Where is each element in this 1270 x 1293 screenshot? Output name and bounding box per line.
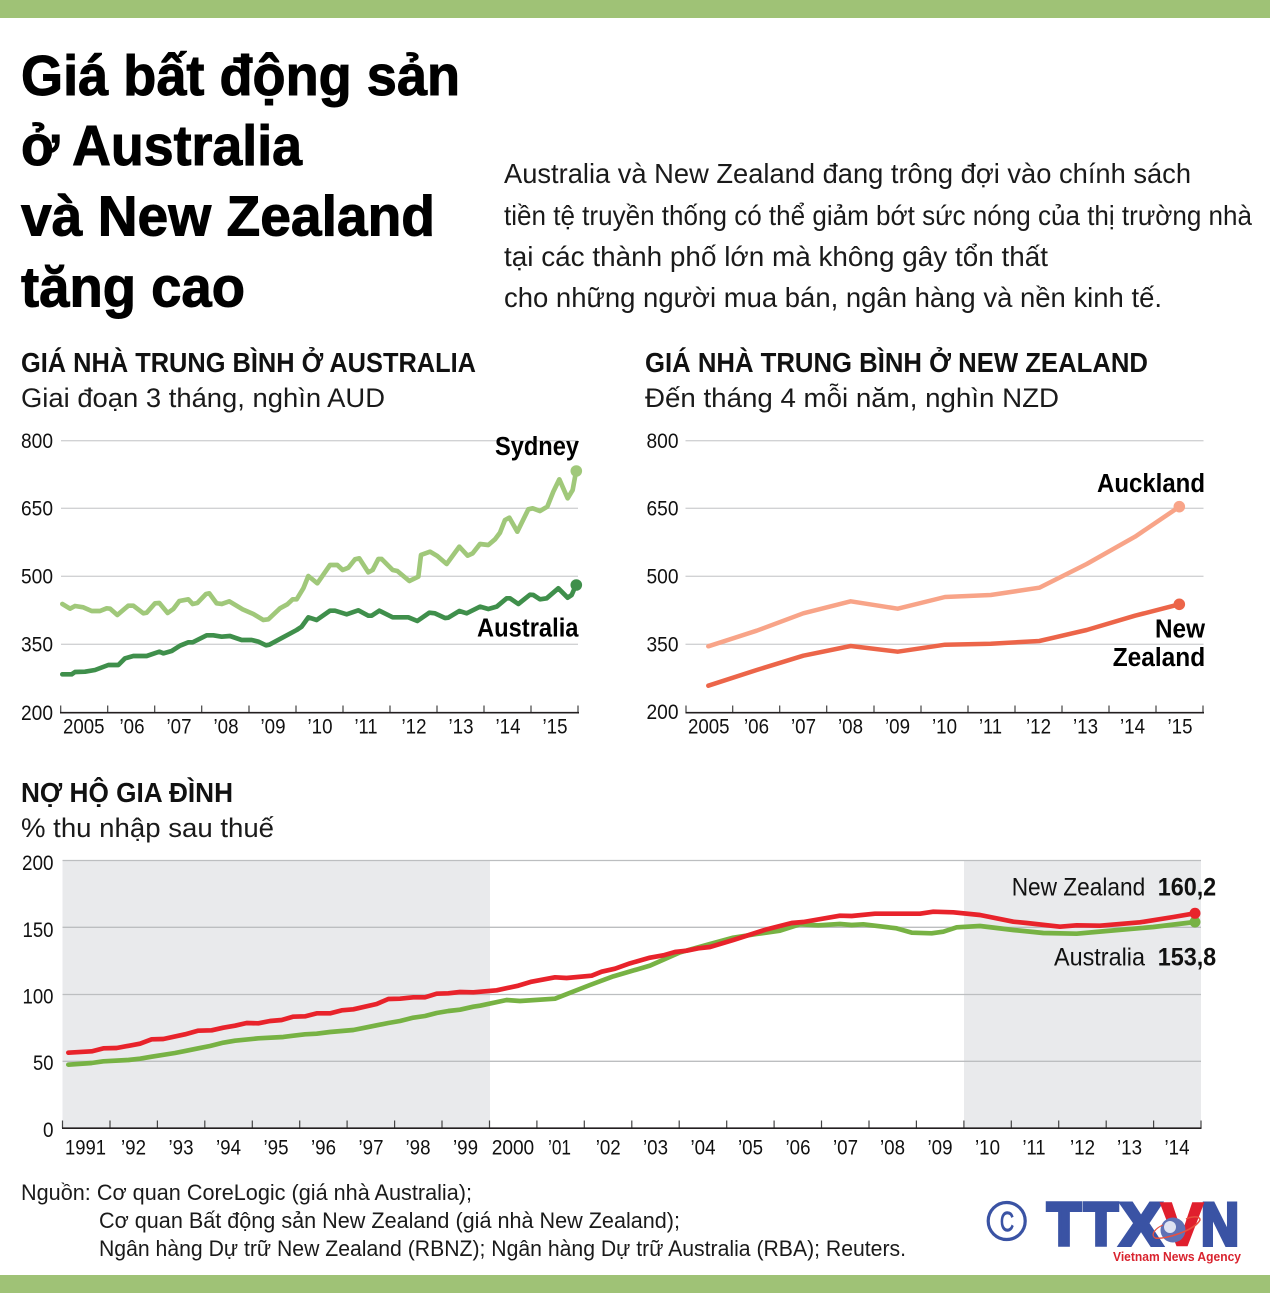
line: Australia (62, 579, 582, 674)
line chart: Australia house prices: 2005 (63, 716, 104, 738)
line chart: Australia house prices: ’10 (308, 716, 332, 738)
shaded period: 2010 to 2014 (964, 860, 1201, 1128)
label: New Zealand (1113, 616, 1205, 672)
heading: New Zealand house prices: Đến tháng 4 mỗi năm, nghìn NZD (645, 382, 1059, 413)
line chart: Australia house prices: 650 (21, 498, 53, 520)
line chart: New Zealand house prices: ’07 (791, 716, 816, 738)
title (21, 44, 460, 320)
heading: Australia house prices: Giai đoạn 3 tháng, nghìn AUD (21, 383, 385, 413)
line: New Zealand debt (68, 908, 1201, 1053)
line chart: New Zealand house prices: 800 (646, 430, 678, 453)
line chart: household debt: ’98 (406, 1136, 430, 1160)
line chart: Australia house prices: ’06 (120, 716, 144, 738)
label: Australia 153,8 (1054, 944, 1216, 972)
line chart: New Zealand house prices: ’11 (979, 716, 1002, 738)
line chart: Australia house prices: 500 (21, 566, 53, 588)
line chart: household debt: ’14 (1164, 1136, 1190, 1160)
heading: household debt: NỢ HỘ GIA ĐÌNH (21, 776, 233, 808)
sources: Cơ quan Bất động sản New Zealand (giá nhà New Zealand); (99, 1208, 680, 1233)
line chart: household debt: 100 (22, 986, 54, 1008)
line chart: household debt: ’12 (1070, 1136, 1095, 1160)
line chart: household debt: ’07 (833, 1136, 858, 1160)
sources: Nguồn: Cơ quan CoreLogic (giá nhà Australia); (21, 1180, 472, 1205)
line chart: Australia house prices: ’14 (496, 716, 521, 738)
line chart: household debt: 2000 (492, 1136, 534, 1160)
logo: TTXVN Vietnam News Agency: X (1120, 1191, 1162, 1258)
line chart: New Zealand house prices: 2005 (688, 716, 730, 738)
label: New Zealand 160,2: New Zealand (1012, 874, 1145, 902)
line chart: Australia house prices: ’12 (402, 716, 426, 738)
intro text block (504, 158, 1253, 313)
line: New Zealand (708, 598, 1185, 686)
label: Australia 153,8: Australia (1054, 944, 1145, 972)
icon: copyright mark: C (1000, 1206, 1014, 1237)
line chart: household debt: 0 (43, 1119, 54, 1142)
line chart: household debt: ’94 (216, 1136, 241, 1160)
label: Australia: Australia (477, 614, 579, 642)
label: Auckland: Auckland (1097, 470, 1205, 498)
line chart: household debt: ’06 (786, 1136, 810, 1160)
title: tăng cao (21, 256, 245, 320)
line chart: household debt: ’96 (311, 1136, 336, 1160)
line chart: household debt: ’04 (690, 1136, 716, 1160)
line chart: household debt: ’13 (1117, 1136, 1142, 1160)
heading: Australia house prices (21, 346, 476, 413)
line chart: household debt: ’10 (975, 1136, 1000, 1160)
line chart: household debt: 150 (22, 919, 54, 942)
intro text block: Australia và New Zealand đang trông đợi vào chính sách (504, 158, 1191, 189)
line chart: New Zealand house prices: ’10 (932, 716, 957, 738)
label: Australia 153,8: 153,8 (1158, 944, 1216, 972)
line chart: Australia house prices: 200 (21, 702, 53, 725)
line chart: household debt: ’92 (121, 1136, 146, 1160)
line chart: New Zealand house prices: 650 (646, 498, 678, 520)
line: Auckland (708, 501, 1185, 646)
logo: TTXVN Vietnam News Agency: Vietnam News Agency (1113, 1250, 1241, 1264)
line chart: household debt: ’09 (928, 1136, 952, 1160)
label: Sydney: Sydney (495, 433, 580, 461)
title: ở Australia (21, 114, 303, 178)
label: New Zealand 160,2: 160,2 (1158, 874, 1216, 902)
sources (21, 1180, 906, 1261)
logo: TTXVN Vietnam News Agency: V (1161, 1191, 1203, 1258)
line chart: Australia house prices: ’07 (166, 716, 192, 738)
line chart: Australia house prices (21, 430, 582, 738)
line chart: Australia house prices: ’13 (448, 716, 474, 738)
heading: Australia house prices: GIÁ NHÀ TRUNG BÌNH Ở AUSTRALIA (21, 346, 476, 378)
line chart: household debt: ’08 (880, 1136, 905, 1160)
intro text block: cho những người mua bán, ngân hàng và nền kinh tế. (504, 282, 1162, 313)
icon: copyright mark (988, 1202, 1025, 1240)
sources: Ngân hàng Dự trữ New Zealand (RBNZ); Ngân hàng Dự trữ Australia (RBA); Reuters. (99, 1236, 906, 1261)
line chart: New Zealand house prices: ’09 (885, 716, 910, 738)
line chart: household debt: ’05 (738, 1136, 763, 1160)
line chart: New Zealand house prices: ’13 (1073, 716, 1098, 738)
heading: household debt (21, 776, 274, 843)
line chart: New Zealand house prices: ’12 (1026, 716, 1051, 738)
line chart: Australia house prices: ’08 (214, 716, 238, 738)
line chart: Australia house prices: 350 (21, 634, 53, 656)
line chart: household debt: 1991 (65, 1136, 106, 1160)
line chart: New Zealand house prices: ’08 (838, 716, 863, 738)
line chart: New Zealand house prices: ’15 (1168, 716, 1192, 738)
logo: TTXVN Vietnam News Agency: T (1047, 1191, 1081, 1258)
top green band (0, 0, 1270, 18)
line chart: household debt: ’11 (1022, 1136, 1046, 1160)
line chart: Australia house prices: ’11 (354, 716, 378, 738)
line chart: household debt: ’01 (548, 1136, 571, 1160)
line chart: New Zealand house prices (646, 430, 1205, 738)
line chart: Australia house prices: ’15 (542, 716, 568, 738)
title: và New Zealand (21, 184, 435, 248)
title: Giá bất động sản (21, 44, 460, 108)
logo: TTXVN Vietnam News Agency: T (1084, 1191, 1118, 1258)
line chart: New Zealand house prices: 350 (646, 634, 678, 656)
line chart: household debt: ’02 (596, 1136, 621, 1160)
line chart: New Zealand house prices: 500 (646, 566, 678, 588)
line chart: New Zealand house prices: ’06 (744, 716, 769, 738)
label: New Zealand: Zealand (1113, 644, 1205, 672)
line chart: household debt (22, 852, 1216, 1160)
heading: New Zealand house prices: GIÁ NHÀ TRUNG BÌNH Ở NEW ZEALAND (645, 346, 1148, 378)
heading: household debt: % thu nhập sau thuế (21, 813, 274, 843)
logo: TTXVN Vietnam News Agency (1047, 1191, 1241, 1264)
line chart: household debt: ’97 (358, 1136, 384, 1160)
logo: TTXVN Vietnam News Agency: N (1201, 1191, 1239, 1258)
line chart: household debt: ’95 (264, 1136, 288, 1160)
heading: New Zealand house prices (645, 346, 1148, 413)
line chart: New Zealand house prices: ’14 (1120, 716, 1145, 738)
line chart: Australia house prices: 800 (21, 430, 53, 453)
shaded period: 1991 to 2000 (62, 860, 490, 1128)
intro text block: tại các thành phố lớn mà không gây tổn thất (504, 241, 1048, 272)
line chart: household debt: 200 (22, 852, 54, 875)
line chart: Australia house prices: ’09 (260, 716, 286, 738)
line chart: household debt: ’99 (453, 1136, 478, 1160)
line chart: household debt: ’93 (168, 1136, 194, 1160)
line chart: New Zealand house prices: 200 (646, 701, 678, 724)
line chart: household debt: 50 (33, 1052, 54, 1075)
line chart: household debt: ’03 (643, 1136, 668, 1160)
line: Sydney (62, 465, 582, 620)
label: New Zealand: New (1155, 616, 1205, 644)
bottom green band (0, 1275, 1270, 1293)
line: Australia debt (68, 916, 1201, 1065)
